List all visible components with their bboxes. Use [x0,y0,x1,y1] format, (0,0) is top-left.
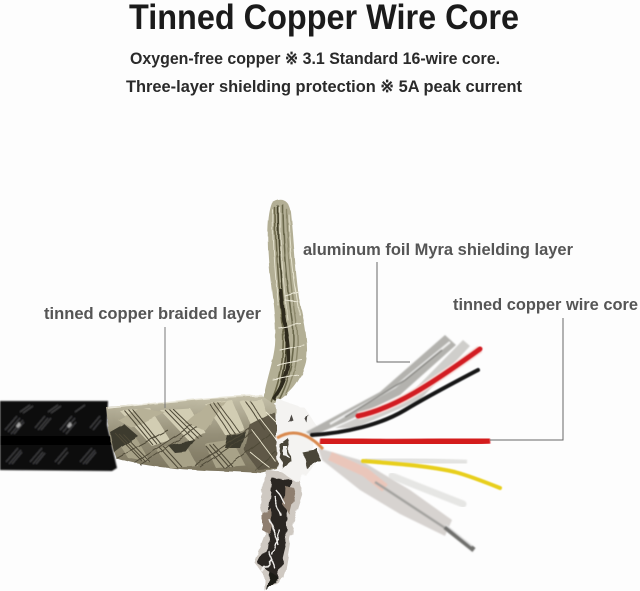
exposed white foil fan [276,398,320,482]
white wire behind yellow [365,459,467,463]
tinned copper braid [106,395,284,473]
red wire upper [358,349,480,416]
orange copper strands [277,433,323,449]
subtitle [126,49,522,96]
red wire upper core [358,349,480,416]
upper foil shielding bundle [306,335,470,436]
raised braid tail [262,200,307,410]
subtitle: Three-layer shielding protection ※ 5A peak current [126,77,522,96]
leader line: braided layer [164,327,166,408]
cable photo illustration [0,200,500,590]
lower white wire [392,476,463,504]
red core wire [320,439,490,443]
lower foil shielding bundle [318,448,474,550]
leader line: wire core [490,318,563,440]
label: tinned copper braided layer: tinned copper braided layer [44,305,262,323]
subtitle: Oxygen-free copper ※ 3.1 Standard 16-wire core. [130,49,500,68]
label: tinned copper wire core: tinned copper wire core [453,296,638,314]
black wire [312,370,478,435]
yellow wire [363,461,500,488]
label: aluminum foil Myra shielding layer: aluminum foil Myra shielding layer [303,241,574,259]
black sleeve [0,401,117,471]
hanging foil tail [255,470,302,590]
leader line: foil layer [377,262,410,362]
